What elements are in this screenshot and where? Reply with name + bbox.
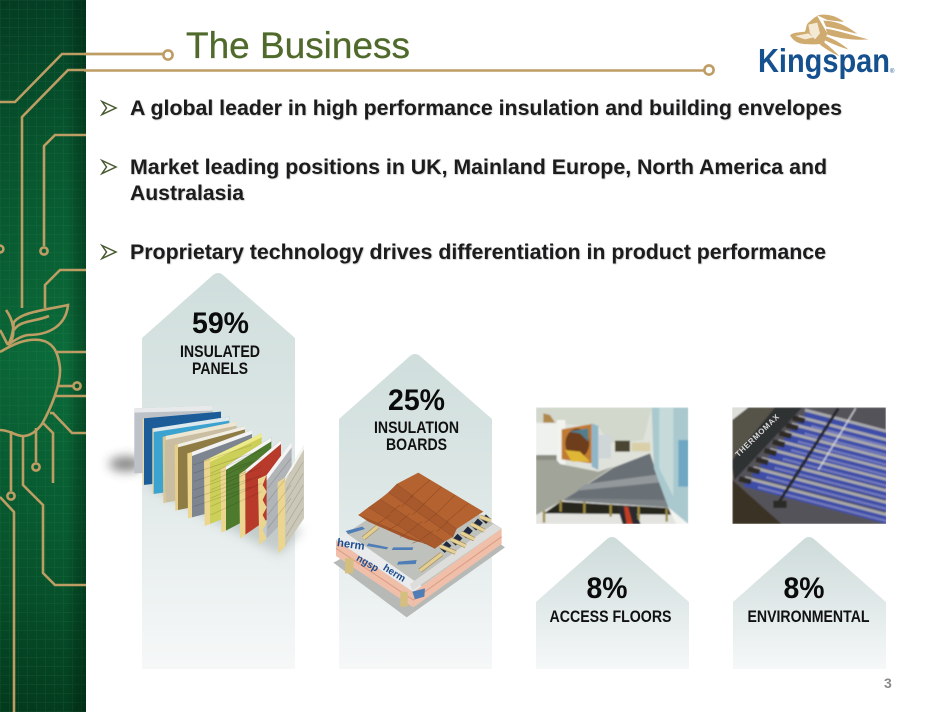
label: access floors: ACCESS FLOORS — [550, 607, 672, 626]
bullet 2 text: Australasia — [130, 182, 244, 205]
panel: access floors — [536, 537, 689, 669]
brand print: THERMOMAX — [733, 412, 781, 459]
circuit lines and apple emblem — [0, 54, 163, 712]
label: environmental: ENVIRONMENTAL — [748, 607, 870, 626]
bullet arrow 1 — [102, 102, 116, 114]
label: insulation boards — [374, 418, 459, 454]
value: 25 percent: 25% — [388, 384, 445, 417]
image: sandwich panels fan — [109, 406, 304, 555]
label: insulation boards: INSULATION — [374, 418, 459, 437]
panel: insulation boards — [339, 354, 492, 669]
title: The Business — [186, 25, 410, 66]
logo: Kingspan — [758, 15, 895, 79]
registered mark: ® — [890, 68, 895, 75]
board print — [336, 537, 407, 585]
panel: environmental — [733, 537, 886, 669]
page number: 3 — [884, 675, 892, 691]
image: access floor interior photo — [536, 407, 688, 524]
board print: herm — [381, 563, 407, 585]
wordmark: Kingspan — [758, 42, 890, 79]
panel: insulated panels — [142, 273, 295, 669]
label: insulated panels: PANELS — [192, 359, 248, 378]
bullet 1 text: A global leader in high performance insulation and building envelopes — [130, 97, 842, 120]
value: access floors 8 percent: 8% — [586, 572, 628, 605]
bullet arrow 3 — [102, 246, 116, 258]
label: insulated panels — [180, 342, 260, 378]
board print: herm — [336, 537, 365, 553]
image: insulated roof build-up — [333, 473, 505, 617]
tiles — [397, 473, 483, 529]
bullet list — [102, 97, 842, 264]
bullet 2 text: Market leading positions in UK, Mainland Europe, North America and — [130, 156, 827, 179]
image: Thermomax solar tubes photo — [732, 407, 886, 524]
label: insulated panels: INSULATED — [180, 342, 260, 361]
header rule with circuit nodes — [84, 50, 714, 75]
icon: lion — [790, 15, 868, 57]
bullet 3 text: Proprietary technology drives differentiation in product performance — [130, 241, 826, 264]
bullet arrow 2 — [102, 160, 116, 174]
battens — [363, 517, 491, 571]
label: insulation boards: BOARDS — [386, 435, 447, 454]
value: 59 percent: 59% — [192, 307, 249, 340]
value: environmental 8 percent: 8% — [784, 572, 824, 605]
board print: ngsp — [354, 553, 380, 575]
sidebar: green circuit panel — [0, 0, 163, 712]
